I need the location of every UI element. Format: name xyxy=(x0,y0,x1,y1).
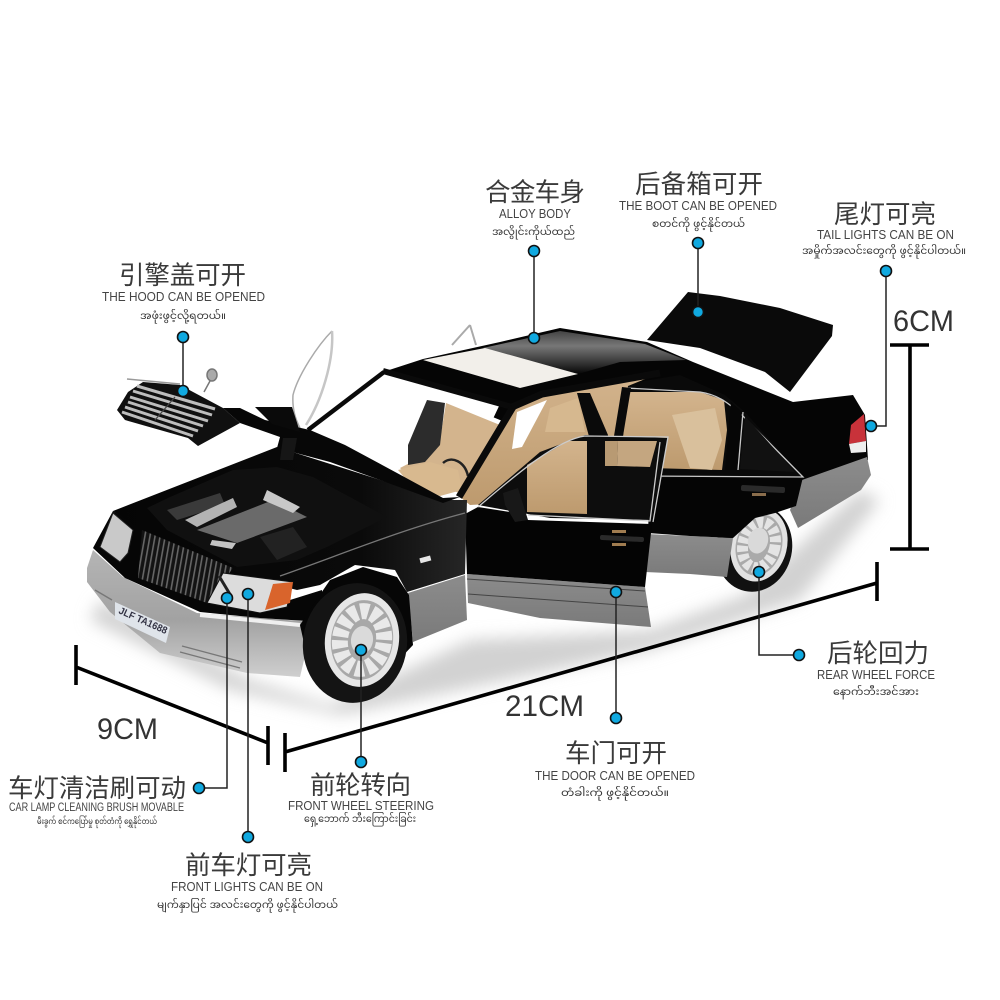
bumper xyxy=(87,550,313,677)
rear door pillar xyxy=(725,402,742,470)
rear lower silver panel xyxy=(790,457,871,528)
callout: alloy body: 合金车身 xyxy=(485,179,585,207)
callout: alloy body: အလွိုင်းကိုယ်ထည် xyxy=(492,224,575,240)
callout: door xyxy=(535,586,695,801)
open trunk lid xyxy=(647,292,833,392)
rear seat xyxy=(620,392,727,470)
callout: car lamp cleaning brush: မီးခွက် စင်ကပြော်မှု စုတ်တံကို ရွှေနိုင်တယ် xyxy=(37,814,157,828)
callout: front lights: FRONT LIGHTS CAN BE ON xyxy=(171,879,323,894)
rear door window interior xyxy=(612,375,802,482)
callout: front wheel steering: 前轮转向 xyxy=(310,772,411,800)
callout: rear wheel force: နောက်ဘီးအင်အား xyxy=(833,684,919,700)
callout: hood: THE HOOD CAN BE OPENED xyxy=(102,289,265,304)
callout: tail lights: 尾灯可亮 xyxy=(834,201,936,229)
B pillar rear xyxy=(614,387,631,436)
driver seat through windshield xyxy=(400,403,500,493)
callout: boot: စတင်ကို ဖွင့်နိုင်တယ် xyxy=(652,216,745,232)
rear door chrome frame xyxy=(625,388,803,477)
licence plate: JLF TA1688 xyxy=(117,606,169,637)
windshield xyxy=(308,372,500,495)
hood top chrome xyxy=(127,379,180,384)
dimension: 21CM xyxy=(285,562,877,772)
callout: rear wheel force xyxy=(754,566,935,700)
left headlight xyxy=(100,513,133,562)
lower bumper vent xyxy=(95,590,242,668)
model car xyxy=(87,292,871,710)
front seat headrest xyxy=(545,398,585,432)
bumper highlight xyxy=(200,615,300,625)
tail light lower white xyxy=(849,441,866,453)
dimension: 9CM xyxy=(76,645,268,765)
front cabin interior xyxy=(460,373,660,505)
dark headrest xyxy=(408,400,445,465)
callout: alloy body xyxy=(485,179,585,344)
hood grille panel xyxy=(117,382,240,446)
steering wheel xyxy=(443,460,468,476)
door mirror far side xyxy=(255,407,300,432)
right headlight xyxy=(207,573,293,613)
hood strut xyxy=(280,438,297,460)
rear door panel xyxy=(648,477,803,538)
door pillar glimpse xyxy=(605,441,618,466)
rear quarter glass xyxy=(740,416,795,472)
callout: tail lights: အမှိုက်အလင်းတွေကို ဖွင့်နိုင်ပါတယ်။ xyxy=(802,243,966,259)
callout: rear wheel force: 后轮回力 xyxy=(827,640,929,668)
firewall and open hood edge xyxy=(223,408,460,503)
door handle xyxy=(600,530,644,546)
lamp washer brush xyxy=(219,576,231,596)
dimension: 21CM: 21CM xyxy=(505,690,584,723)
windshield header and pillars xyxy=(308,371,660,497)
door sill lines xyxy=(467,579,648,607)
sunroof xyxy=(423,348,578,388)
fender highlight xyxy=(280,513,465,576)
callout: car lamp cleaning brush: 车灯清洁刷可动 xyxy=(8,775,186,803)
hood emblem xyxy=(204,369,217,392)
callout: car lamp cleaning brush: CAR LAMP CLEANING BRUSH MOVABLE xyxy=(9,802,184,814)
callout: alloy body: ALLOY BODY xyxy=(499,206,571,221)
rear door sill xyxy=(645,534,733,577)
front door seat view xyxy=(527,441,587,514)
dimension: 9CM: 9CM xyxy=(97,713,158,746)
rear rim xyxy=(723,502,795,588)
far-side door glass xyxy=(293,325,476,428)
roof highlight xyxy=(483,331,686,374)
callout: tail lights xyxy=(802,201,966,432)
front door panel xyxy=(465,507,652,587)
callout: hood xyxy=(102,262,265,396)
rear seat light side xyxy=(672,408,722,470)
front door window view xyxy=(478,435,668,520)
roof and rear body xyxy=(383,328,868,520)
front tyre xyxy=(295,576,415,710)
callout: front lights: မျက်နှာပြင် အလင်းတွေကို ဖွင့်နိုင်ပါတယ် xyxy=(157,897,338,913)
ground shadow xyxy=(90,490,880,715)
fender marker xyxy=(419,556,431,563)
callout: hood: 引擎盖可开 xyxy=(119,262,246,290)
callout: front wheel steering: ရှေ့ဘောက် ဘီးကြောင်းခြင်း xyxy=(304,811,416,827)
engine bay xyxy=(147,467,387,567)
B pillar xyxy=(577,393,608,470)
callout: hood: အဖုံးဖွင့်လို့ရတယ်။ xyxy=(140,308,226,324)
indicator lamp xyxy=(265,582,293,610)
callout: car lamp cleaning brush xyxy=(8,592,232,828)
dimension: 6CM xyxy=(890,305,954,549)
rear tyre xyxy=(708,497,800,599)
callout: tail lights: TAIL LIGHTS CAN BE ON xyxy=(817,227,954,242)
front door lower silver xyxy=(467,574,651,627)
rear door handle xyxy=(741,485,785,496)
callout: door: 车门可开 xyxy=(565,740,667,768)
door glass rear seat view xyxy=(617,441,657,467)
wheel arch xyxy=(300,567,413,680)
callout: rear wheel force: REAR WHEEL FORCE xyxy=(817,667,935,682)
callout: front wheel steering xyxy=(288,644,434,827)
trunk strut gap xyxy=(710,358,762,382)
callout: boot: THE BOOT CAN BE OPENED xyxy=(619,198,777,213)
front black nose xyxy=(93,511,322,622)
callout: front wheel steering: FRONT WHEEL STEERING xyxy=(288,798,434,813)
cabin window glimpse xyxy=(512,400,547,449)
hood grille bars xyxy=(122,386,215,436)
callout: door: တံခါးကို ဖွင့်နိုင်တယ်။ xyxy=(561,785,669,801)
callout: front lights: 前车灯可亮 xyxy=(185,852,312,880)
front fender body xyxy=(113,447,467,592)
front rim xyxy=(319,588,405,692)
tail light xyxy=(849,414,866,444)
dimension: 6CM: 6CM xyxy=(893,305,954,338)
door mirror xyxy=(503,488,528,522)
front fender silver trim xyxy=(408,575,467,642)
callout: boot xyxy=(619,171,777,318)
callout: boot: 后备箱可开 xyxy=(635,171,763,199)
engine parts xyxy=(167,490,307,560)
door frame chrome xyxy=(478,436,668,522)
seat cushion xyxy=(398,462,462,496)
callout: front lights xyxy=(157,588,338,913)
callout: door: THE DOOR CAN BE OPENED xyxy=(535,768,695,783)
grille xyxy=(138,530,233,603)
